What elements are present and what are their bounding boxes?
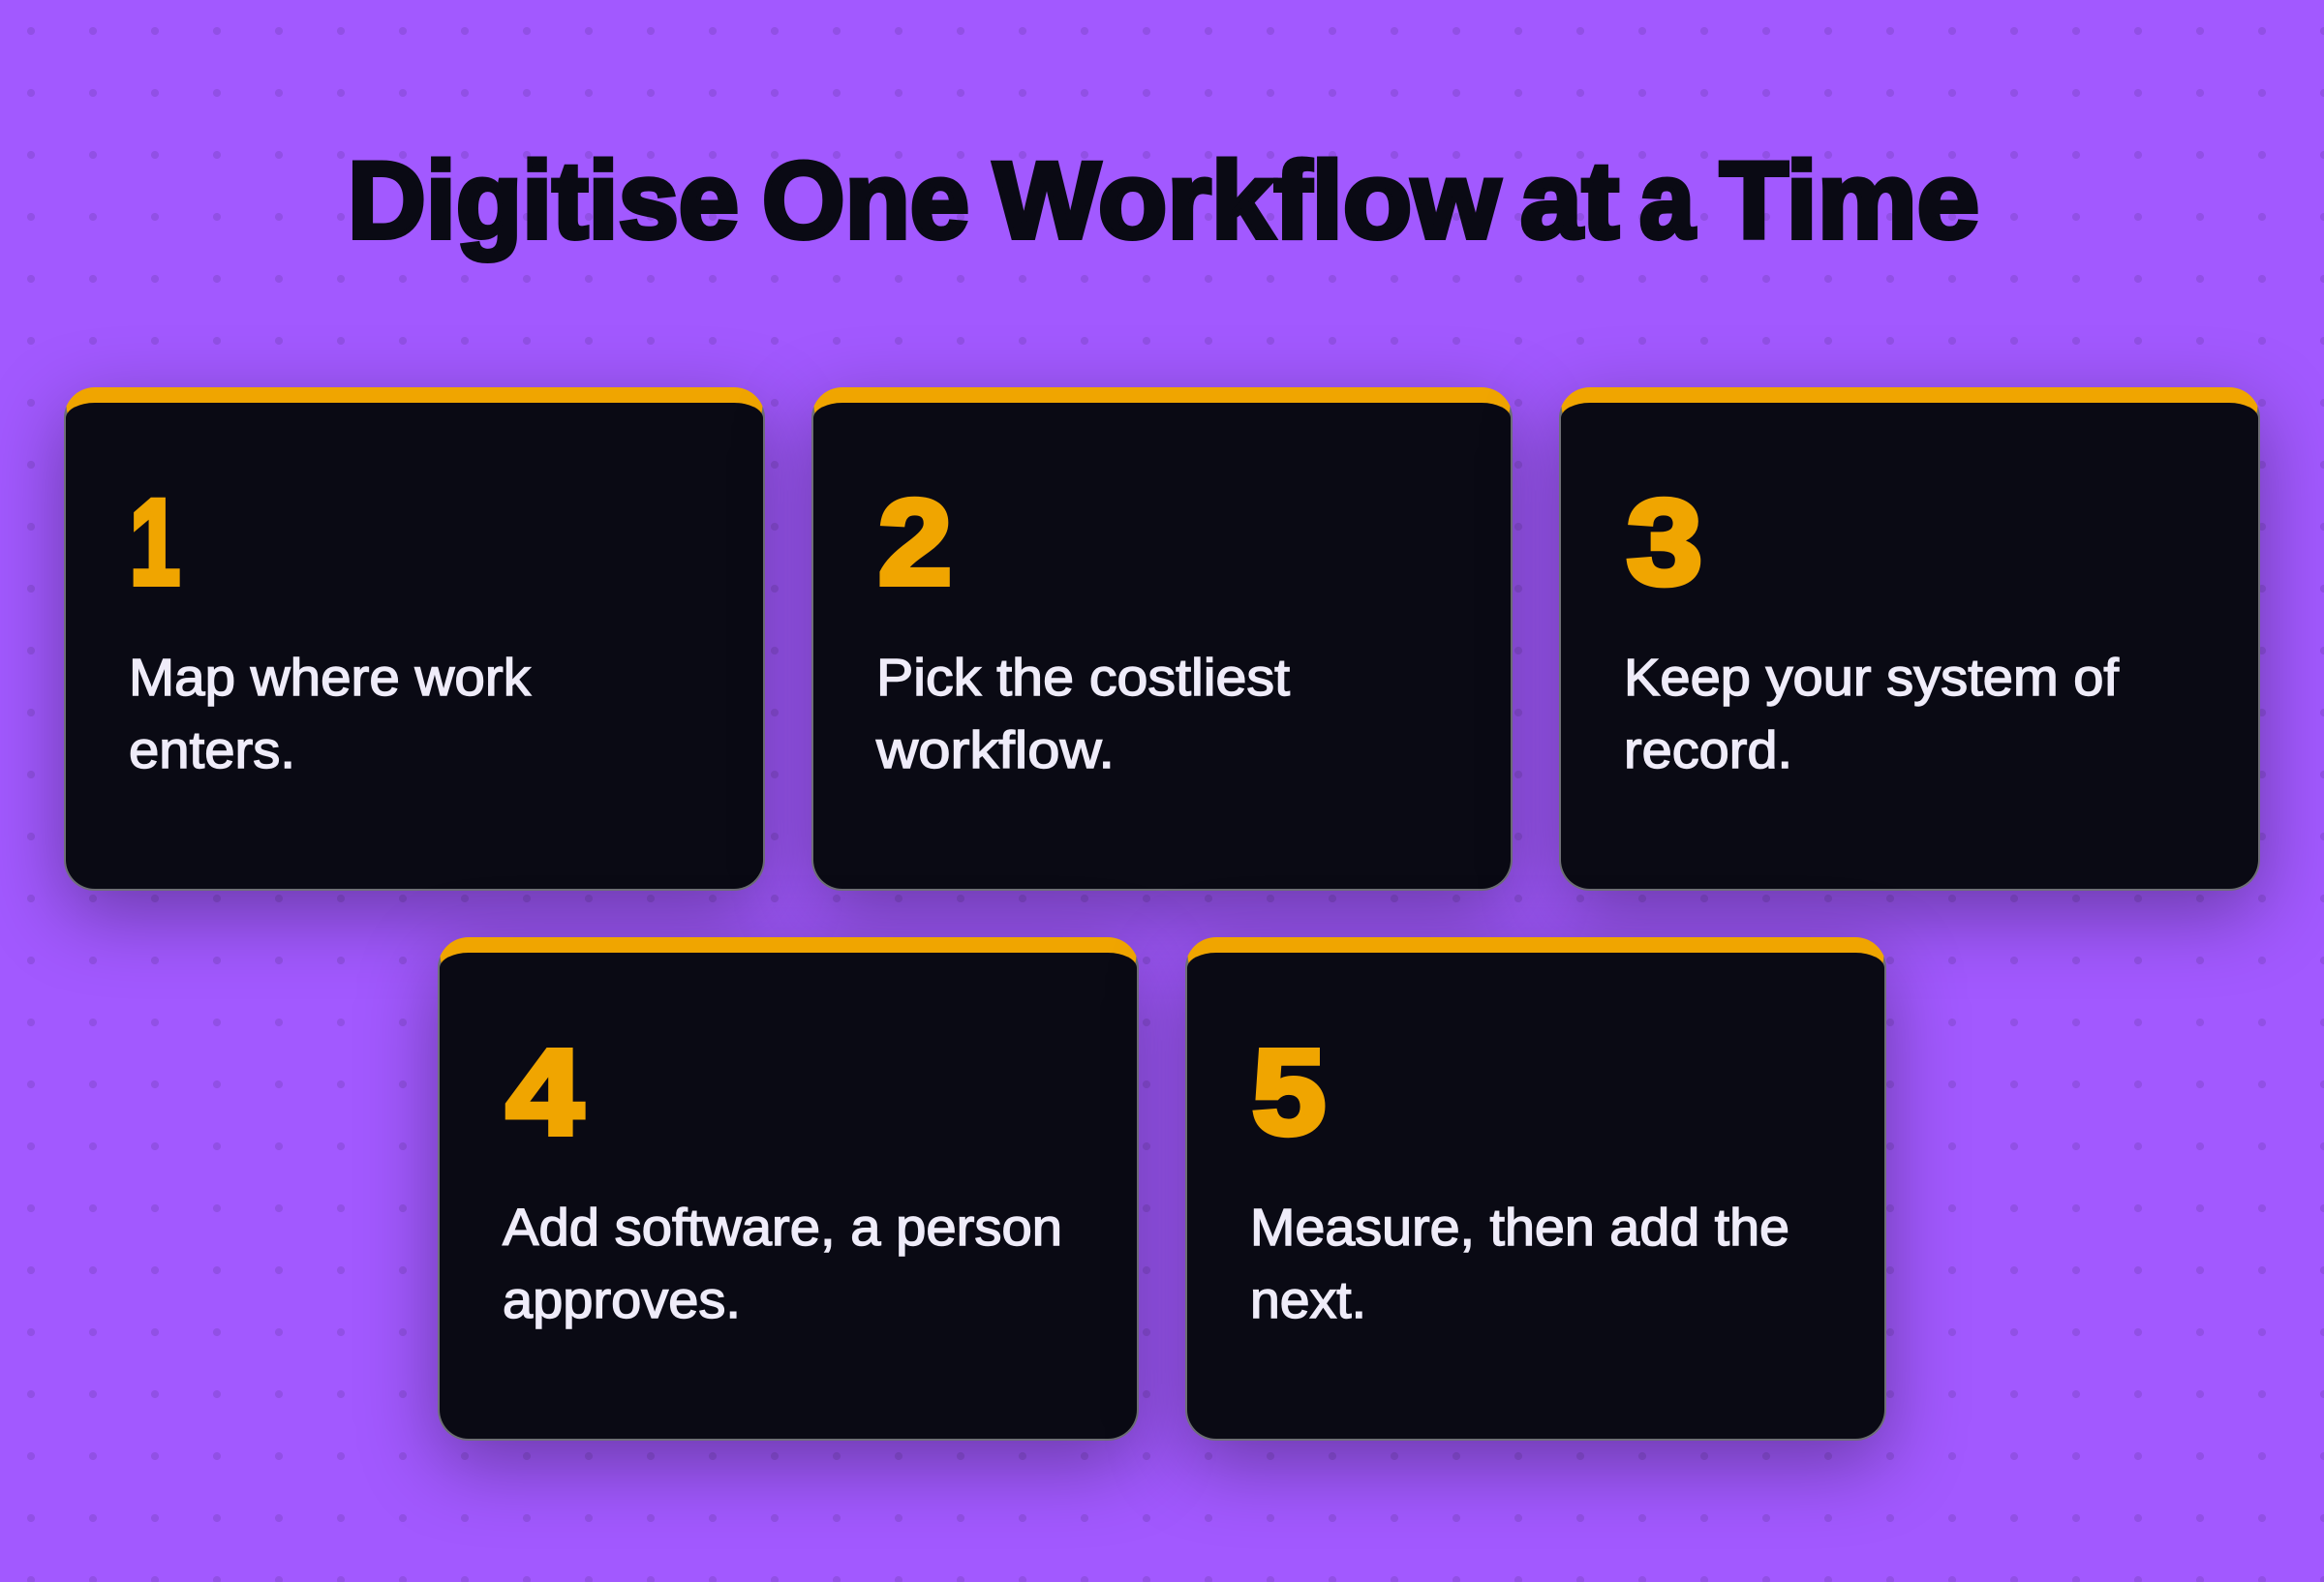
step 1 content — [129, 475, 533, 779]
number 3: 3 — [1627, 475, 1702, 610]
panel: step 4 card — [438, 937, 1139, 1441]
step 1 text: enters. — [129, 721, 295, 779]
panel: step 3 card — [1559, 387, 2260, 891]
step 2 text: Pick the costliest — [876, 649, 1290, 707]
title: a — [1639, 139, 1696, 261]
step 4 content — [502, 1025, 1062, 1329]
step 3 text: Keep your system of — [1624, 649, 2120, 707]
panel: step 1 card — [64, 387, 765, 891]
panel: step 2 card — [811, 387, 1513, 891]
number 1: 1 — [130, 475, 180, 610]
step 5 text: Measure, then add the — [1250, 1199, 1789, 1257]
title — [348, 139, 1979, 263]
number 4: 4 — [506, 1025, 583, 1160]
number 2: 2 — [878, 475, 952, 610]
title: Workflow — [994, 139, 1501, 261]
step 2 content — [875, 475, 1290, 779]
title: One — [762, 139, 969, 261]
step 5 content — [1250, 1025, 1789, 1329]
step 3 text: record. — [1624, 721, 1792, 779]
step 4 text: approves. — [503, 1271, 741, 1329]
step 3 content — [1624, 475, 2120, 779]
title: Digitise — [348, 139, 739, 261]
step 5 text — [1250, 1199, 1789, 1329]
step 2 text — [875, 649, 1290, 779]
number 5: 5 — [1252, 1025, 1326, 1160]
step 5 text: next. — [1250, 1271, 1366, 1329]
step 4 text — [503, 1199, 1062, 1329]
step 3 text — [1624, 649, 2120, 779]
panel: step 5 card — [1185, 937, 1886, 1441]
step 2 text: workflow. — [875, 721, 1115, 779]
step 1 text — [129, 649, 532, 779]
title: at — [1520, 139, 1619, 261]
title: Time — [1720, 139, 1979, 261]
step 1 text: Map where work — [129, 649, 532, 707]
step 4 text: Add software, a person — [503, 1199, 1062, 1257]
